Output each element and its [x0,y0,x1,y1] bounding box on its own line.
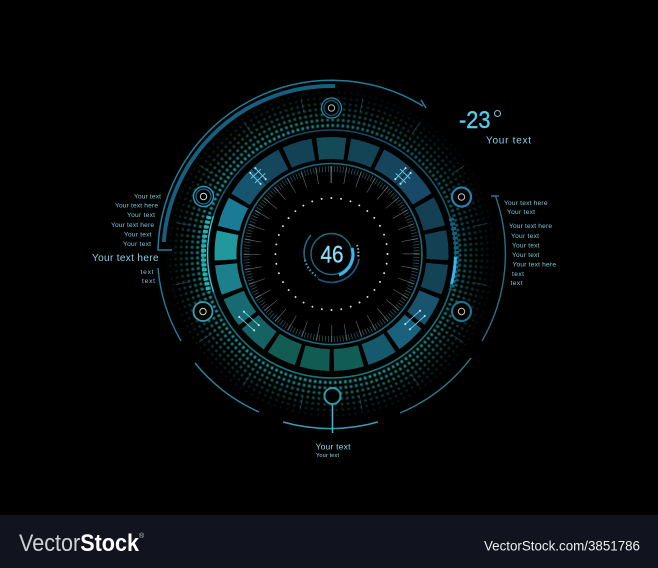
right arc [482,196,505,341]
node: upper left [194,186,214,206]
registered mark: ® [139,532,145,540]
node: lower right [452,302,471,321]
crosshair top left [247,165,269,187]
right text list: Your text [507,209,535,216]
degree sign [494,110,500,116]
crosshair markers [238,165,426,332]
left emphasized label: Your text here [92,253,159,264]
left text list: Your text here [115,202,158,210]
thick top-left progress arc [164,86,335,242]
right text list: Your text [512,252,540,259]
left highlighted bracket [203,216,214,292]
logo: VectorStock [19,530,139,557]
bottom stem [332,405,334,433]
faint radial marks [153,75,510,433]
temperature readout [459,107,531,146]
left text list: Your text [127,212,155,219]
left text list: Your text [134,194,161,200]
crosshair bottom right [404,309,426,331]
label: 46: 46 [320,242,344,268]
left text list: text [140,269,154,276]
bottom caption [316,442,351,459]
left text list: Your text [123,241,151,248]
right text list [504,200,556,287]
node: upper right [452,188,471,206]
outer arcs [158,80,505,433]
right text list: Your text [511,233,539,240]
left text list: text [142,278,155,285]
fine tick ring [246,169,416,339]
value: -23 [459,107,490,134]
left text list: Your text [124,232,152,238]
inner ring line [241,164,422,344]
outer ring line [208,130,456,378]
left text list: Your text here [111,222,154,229]
tile ring [182,104,481,404]
crosshair top right [392,165,414,187]
node: lower left [194,302,212,321]
radial dial [153,75,510,433]
bottom caption: Your text [316,453,339,459]
left text list [92,194,161,285]
node: bottom [324,388,340,404]
top outer arc with hook [158,80,426,250]
long tick ring [252,174,411,334]
footer band [0,515,658,568]
right text list: text [510,280,523,287]
node: top [322,98,342,118]
right text list: Your text here [509,223,552,230]
right text list: Your text here [504,200,548,207]
right text list: Your text [512,242,540,250]
lower left arc [195,363,259,412]
centre gauge [304,234,359,282]
bottom arc [283,422,378,429]
bottom caption: Your text [316,442,351,452]
lower right arc [400,358,471,413]
right highlighted bracket [451,218,456,290]
crosshair bottom left [238,310,260,332]
caption: Your text [486,136,531,146]
halftone dot rings [170,92,493,416]
dotted inner circle [276,198,388,310]
right text list: text [512,271,524,278]
image id: VectorStock.com/3851786 [484,538,640,554]
left lower arc [158,268,181,341]
right text list: Your text here [512,262,556,268]
